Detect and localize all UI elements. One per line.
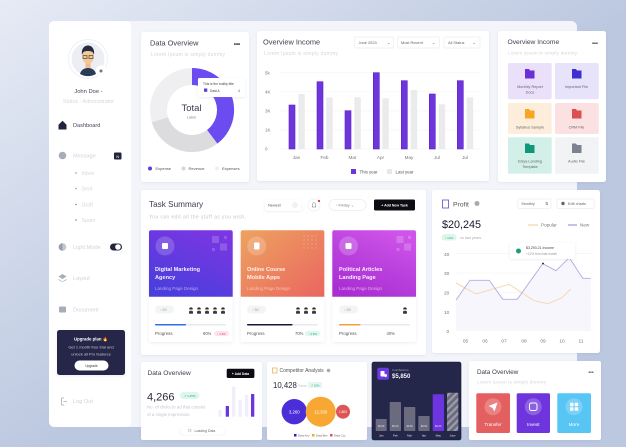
y axis labels: 1K xyxy=(265,128,270,132)
growth badge xyxy=(442,234,481,240)
task card: political articles: Landing Page Design xyxy=(339,286,383,291)
file: elsya landing xyxy=(508,137,552,174)
tooltip: 4 xyxy=(238,89,240,93)
balance: $5,850 xyxy=(392,374,411,380)
balance: Total Balance xyxy=(392,368,409,372)
legend: Expenses xyxy=(222,166,240,171)
loading button: Loading Data xyxy=(194,429,215,433)
toolbar: ▫ Friday ⌄ xyxy=(336,202,354,208)
y axis labels xyxy=(444,252,450,335)
balance xyxy=(392,368,411,380)
heading: Task Summary xyxy=(149,200,204,209)
tooltip: This is the tooltip title xyxy=(203,82,234,86)
nav: light mode: Light Mode xyxy=(73,245,101,251)
filters: ⌄ xyxy=(387,40,390,45)
panel: overview income files xyxy=(498,31,606,182)
task card: digital marketing: ↓ 2.8% xyxy=(217,332,226,336)
x axis labels: 10 xyxy=(559,338,565,344)
bubble chart: 12,320 xyxy=(314,409,328,414)
controls xyxy=(518,199,594,208)
upgrade card: Get 1 month free trial and xyxy=(68,344,114,350)
legend xyxy=(351,169,414,174)
subheading: You can edit all the stuff as you wish. xyxy=(149,214,246,220)
controls: Monthly xyxy=(522,202,535,206)
y axis labels: 30 xyxy=(444,271,450,277)
file: crm: CRM File xyxy=(569,126,584,130)
x axis labels: 06 xyxy=(482,338,488,344)
description xyxy=(147,404,206,417)
task card: digital marketing: 60% xyxy=(203,331,212,336)
file: syllabus: Syllabus Sample xyxy=(516,126,544,130)
tooltip: Data A xyxy=(210,89,220,93)
task card: digital marketing: ▫ 20 xyxy=(160,308,167,312)
panel: data overview clicks xyxy=(141,362,262,440)
bar values xyxy=(378,425,442,428)
y axis labels: 0 xyxy=(446,329,450,335)
legend: Revenue xyxy=(188,166,205,171)
panel: competitor analysis xyxy=(267,362,367,440)
y axis labels: 40 xyxy=(444,252,450,258)
gridlines xyxy=(280,73,480,149)
x axis labels: 05 xyxy=(463,338,468,344)
bar values: $0.00 xyxy=(406,425,413,428)
value badge: ↗ 1.25% xyxy=(184,394,196,398)
subheading: Lorem Ipsum is simply dummy xyxy=(264,51,338,57)
nav: message sub-items: Spam xyxy=(82,218,96,224)
x axis labels: Mar xyxy=(349,155,357,160)
nav: document: Document xyxy=(73,308,99,314)
total value: $20,245 xyxy=(442,219,481,231)
month labels: Apr xyxy=(422,434,426,438)
x axis labels xyxy=(293,155,468,160)
task card: online course: Progress xyxy=(247,331,265,336)
legend xyxy=(294,433,346,437)
panel: overview income bar chart xyxy=(257,31,489,181)
subheading: Lorem Ipsum is simply dummy xyxy=(477,380,547,386)
heading: Competitor Analysis xyxy=(280,368,324,374)
legend: New xyxy=(580,222,590,228)
mini bars xyxy=(218,387,254,417)
chart tooltip: $3,293.21 Income xyxy=(526,246,554,250)
task card: political articles: Landing Page xyxy=(339,275,376,281)
task card: political articles: 40% xyxy=(386,331,395,336)
filters: All Status xyxy=(448,40,464,45)
nav: message: Message xyxy=(73,154,96,160)
controls: ⇅ xyxy=(545,202,549,206)
tooltip xyxy=(198,78,245,97)
y axis labels: 5k xyxy=(265,70,270,76)
task card: online course: Mobile Apps xyxy=(247,275,280,281)
heading: Overview Income xyxy=(263,38,320,46)
sales value: ↗ 10% xyxy=(311,383,320,387)
y axis labels: 20 xyxy=(444,290,450,296)
nav: log out: Log Out xyxy=(73,399,93,405)
file: important: Important File xyxy=(565,85,588,89)
upgrade card xyxy=(57,330,125,375)
upgrade card: Upgrade plan 🔥 xyxy=(74,336,108,342)
heading: Data Overview xyxy=(148,370,191,377)
month labels: May xyxy=(436,434,442,438)
toolbar: + Add New Task xyxy=(381,204,408,208)
x axis labels: Feb xyxy=(321,155,329,160)
nav: dashboard: Dashboard xyxy=(73,123,100,129)
task card: political articles: Political Articles xyxy=(339,267,382,273)
bubble chart xyxy=(282,397,350,427)
growth badge: ↑ 12% xyxy=(445,236,453,240)
avatar xyxy=(68,40,108,78)
bars last year xyxy=(298,90,473,149)
filters: June 2023 xyxy=(358,40,377,45)
task card: digital marketing xyxy=(149,230,233,342)
file: important xyxy=(555,63,599,99)
upgrade card: unlock all Pro features xyxy=(71,352,111,356)
task card: online course: Online Course xyxy=(247,267,285,273)
x axis labels: 07 xyxy=(501,338,507,344)
nav: message sub-items: Inbox xyxy=(82,171,95,177)
chart tooltip xyxy=(510,243,575,259)
nav: layout xyxy=(58,274,90,282)
legend: This year xyxy=(360,170,378,174)
task card: online course: ▫ 30 xyxy=(252,308,259,312)
icon: wallet xyxy=(377,368,389,380)
task card: digital marketing: Progress xyxy=(155,331,173,336)
filters: Most Recent xyxy=(401,40,424,45)
legend: Data Any xyxy=(298,433,310,437)
x axis labels: Jul xyxy=(434,155,440,160)
legend: Popular xyxy=(541,222,557,228)
y axis labels: 4K xyxy=(265,90,270,94)
growth badge: vs last years xyxy=(460,236,481,240)
nav: message sub-items xyxy=(75,171,96,224)
file: audio: Audio File xyxy=(568,160,585,164)
file: elsya landing: Elsya Landing xyxy=(518,160,542,164)
bar values: $0.00 xyxy=(421,425,428,428)
file: monthly report: Monthly Report xyxy=(517,85,544,89)
task card: digital marketing: Agency xyxy=(155,275,176,281)
legend: Data Bee xyxy=(316,433,328,437)
nav: message sub-items: Draft xyxy=(82,202,94,208)
y axis labels: 0 xyxy=(265,146,268,152)
x axis labels: May xyxy=(405,155,414,160)
gridlines xyxy=(456,254,592,312)
heading: Data Overview xyxy=(477,369,519,376)
panel: dark balance chart xyxy=(372,362,461,440)
x axis labels: 11 xyxy=(579,338,584,344)
panel: data overview actions xyxy=(469,361,601,440)
x axis labels: 08 xyxy=(521,338,527,344)
bars this year xyxy=(289,73,463,149)
legend: Data Coc xyxy=(334,433,346,437)
description: of a single impression. xyxy=(147,412,191,417)
bars xyxy=(376,393,458,431)
heading: Profit xyxy=(453,202,469,208)
y axis labels xyxy=(265,70,270,152)
main panel xyxy=(49,21,577,427)
menu dots: ••• xyxy=(234,42,240,48)
month labels: Mar xyxy=(407,434,412,438)
chart tooltip: +12% from last month xyxy=(526,252,557,256)
x axis labels xyxy=(463,338,584,344)
x axis labels: Apr xyxy=(377,155,385,160)
controls: Edit charts xyxy=(568,202,586,206)
description: No. of clicks to ad that consist xyxy=(147,404,206,410)
nav: log out xyxy=(62,398,93,405)
nav: message: N xyxy=(116,154,119,159)
nav: light mode xyxy=(59,243,122,251)
toolbar: Newest xyxy=(268,204,282,208)
file: crm xyxy=(555,103,599,134)
file: audio xyxy=(555,137,599,174)
nav: dashboard xyxy=(59,122,100,129)
action: transfer: Transfer xyxy=(484,422,502,427)
x axis labels: 09 xyxy=(540,338,546,344)
line chart xyxy=(456,258,591,331)
task card: digital marketing: Digital Marketing xyxy=(155,267,201,273)
filters: ⌄ xyxy=(472,40,476,45)
subheading: Lorem Ipsum is simply dummy xyxy=(151,52,226,58)
task card: political articles xyxy=(332,230,416,342)
upgrade card: Upgrade xyxy=(85,364,98,368)
action: more: More xyxy=(569,422,580,427)
panel: data overview donut xyxy=(141,32,249,182)
y axis labels: 3K xyxy=(265,108,270,114)
task card: political articles: Progress xyxy=(339,331,357,336)
file: syllabus xyxy=(508,103,552,134)
heading xyxy=(442,200,480,208)
nav: message xyxy=(59,152,122,160)
menu dots: ••• xyxy=(592,41,598,47)
sales value: Sales xyxy=(298,384,307,388)
file: monthly report: Docs xyxy=(526,90,534,94)
legend: Last year xyxy=(396,170,414,174)
bubble chart: 3,260 xyxy=(289,409,300,414)
file: elsya landing: Template xyxy=(522,165,538,169)
panel: task summary xyxy=(141,190,426,355)
task card: online course: 70% xyxy=(295,331,304,336)
task card: online course: ↑ 2.8% xyxy=(308,332,317,336)
action: invest: Invest xyxy=(527,422,540,427)
subheading: Lorem Ipsum is simply dummy xyxy=(508,50,578,56)
heading: Overview Income xyxy=(508,39,559,46)
nav: message sub-items: Sent xyxy=(82,186,93,192)
sales value xyxy=(273,381,322,390)
panel: sidebar xyxy=(49,21,131,427)
task card: digital marketing: Landing Page Design xyxy=(155,286,199,291)
month labels xyxy=(379,434,456,438)
legend: Expense xyxy=(156,166,172,171)
y axis labels: 10 xyxy=(444,310,450,316)
donut chart: Total xyxy=(181,103,202,114)
bubble chart: 1,800 xyxy=(339,410,347,414)
toolbar xyxy=(265,199,415,211)
bar values: $0.00 xyxy=(378,425,385,428)
nav: document xyxy=(59,306,99,314)
heading: Data Overview xyxy=(150,38,199,48)
legend xyxy=(528,222,590,228)
panel: profit xyxy=(432,190,600,353)
task card: online course xyxy=(241,230,324,342)
filters xyxy=(354,37,480,48)
sales value: 10,428 xyxy=(273,381,297,390)
legend xyxy=(148,166,240,171)
x axis labels: Jan xyxy=(293,155,301,160)
month labels: June xyxy=(450,434,456,438)
file: monthly report xyxy=(508,63,552,99)
bar values: $0.00 xyxy=(392,425,399,428)
profile name: John Doe - xyxy=(74,89,103,95)
task card: political articles: ▫ 25 xyxy=(344,308,351,312)
nav: layout: Layout xyxy=(73,276,90,282)
task card: online course: Landing Page Design xyxy=(247,286,291,291)
add data button: + Add Data xyxy=(232,372,249,376)
bar values: $0.00 xyxy=(435,425,442,428)
value: 4,266 xyxy=(147,392,175,404)
donut chart: Label xyxy=(187,116,196,120)
profile status: Status : Administrator xyxy=(63,99,114,105)
month labels: Jan xyxy=(379,434,384,438)
month labels: Feb xyxy=(393,434,398,438)
donut chart xyxy=(150,68,234,152)
filters: ⌄ xyxy=(432,40,435,45)
menu dots: ••• xyxy=(588,370,594,376)
x axis labels: Jul xyxy=(462,155,468,160)
